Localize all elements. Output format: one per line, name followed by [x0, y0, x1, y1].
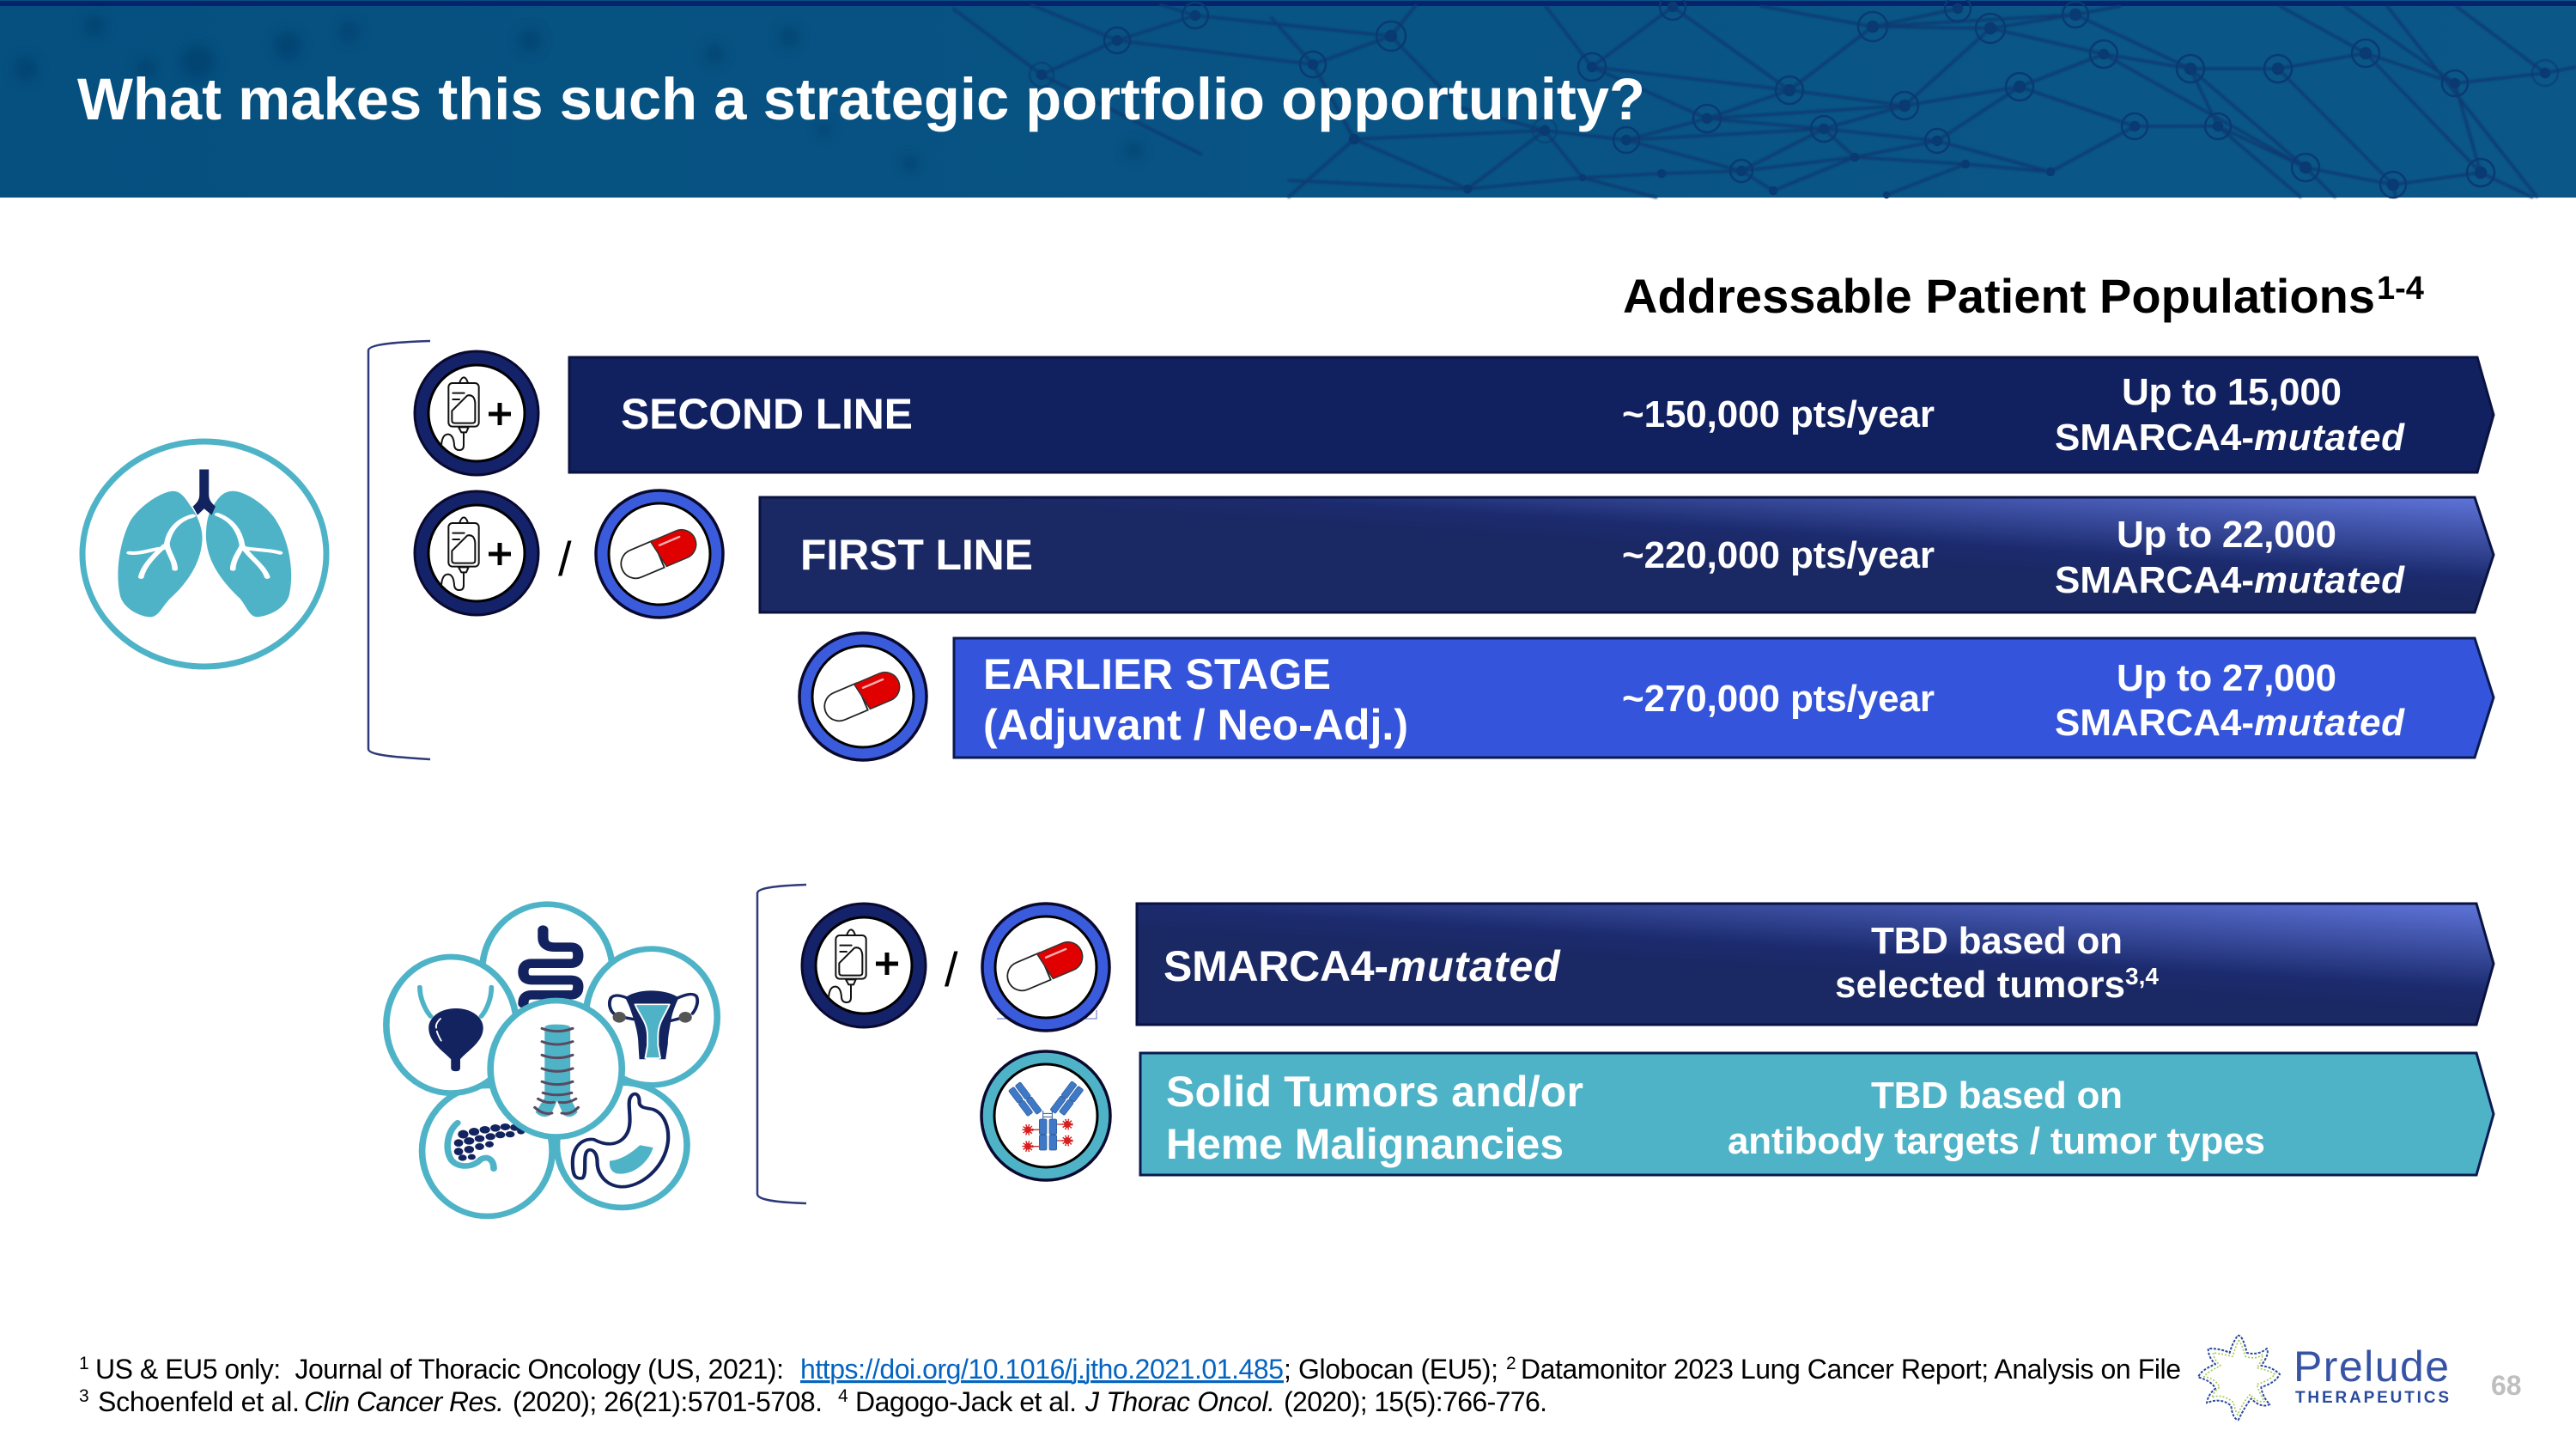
arrow bar: SMARCA4-mutated: TBD based on: [1871, 920, 2123, 962]
arrow bar: solid tumors and heme malignancies: Heme Malignancies: [1166, 1120, 1564, 1168]
icon cluster: solid tumor organs: [386, 904, 717, 1216]
footnote line 2: 3: [79, 1386, 89, 1406]
separator slash: SMARCA4 row: /: [945, 942, 958, 996]
footnote line 1: 2: [1506, 1354, 1516, 1373]
arrow bar: solid tumors and heme malignancies: Solid Tumors and/or: [1166, 1068, 1583, 1116]
separator slash: first line: /: [558, 532, 572, 586]
arrow bar: first line: SMARCA4-mutated: [2055, 559, 2405, 601]
arrow bar: earlier stage: ~270,000 pts/year: [1622, 678, 1935, 720]
title: What makes this such a strategic portfolio opportunity?: [77, 66, 1645, 132]
arrow bar: earlier stage: SMARCA4-mutated: [2055, 702, 2405, 744]
organ: uterus: [586, 949, 717, 1085]
arrow bar: second line: SMARCA4-mutated: [2055, 417, 2405, 459]
icon: oral pill, first line: [596, 490, 723, 618]
column heading: addressable patient populations: 1-4: [2377, 271, 2424, 307]
organ: stomach: [556, 1083, 687, 1208]
arrow bar: SMARCA4-mutated: [1137, 904, 2494, 1025]
footnote line 1: Datamonitor 2023 Lung Cancer Report; Analysis on File: [1521, 1354, 2181, 1385]
arrow bar: second line: Up to 15,000: [2122, 371, 2342, 413]
footnote line 2: (2020); 26(21):5701-5708.: [513, 1386, 823, 1417]
footnote line 2: (2020); 15(5):766-776.: [1284, 1386, 1547, 1417]
arrow bar: earlier stage: (Adjuvant / Neo-Adj.): [983, 701, 1408, 749]
organ: bladder: [386, 957, 516, 1093]
logo: Prelude Therapeutics: Prelude: [2293, 1342, 2449, 1391]
bracket: lung group: [368, 341, 430, 759]
icon: lungs: [82, 441, 326, 667]
page number: 68: [2491, 1370, 2522, 1401]
footnote line 2: Schoenfeld et al.: [98, 1386, 300, 1417]
organ: pancreas: [422, 1086, 552, 1216]
footnote line 2: Clin Cancer Res.: [304, 1386, 504, 1417]
arrow bar: earlier stage: EARLIER STAGE: [983, 650, 1331, 698]
arrow bar: SMARCA4-mutated: 3,4: [2125, 963, 2159, 989]
icon: IV chemotherapy, second line: [415, 351, 538, 475]
header banner: [0, 0, 2576, 198]
arrow bar: earlier stage: Up to 27,000: [2117, 657, 2336, 699]
arrow bar: SMARCA4-mutated: selected tumors: [1835, 964, 2125, 1006]
footnote line 1: 1: [79, 1354, 89, 1373]
footnote line 1: https://doi.org/10.1016/j.jtho.2021.01.485: [800, 1354, 1284, 1385]
arrow bar: solid tumors and heme malignancies: antibody targets / tumor types: [1728, 1120, 2265, 1162]
icon: IV chemotherapy, first line: [415, 491, 538, 615]
logo: Prelude Therapeutics: [2198, 1336, 2449, 1420]
arrow bar: solid tumors and heme malignancies: TBD based on: [1871, 1075, 2123, 1117]
footnote line 1: ; Globocan (EU5);: [1284, 1354, 1498, 1385]
footnote line 2: J Thorac Oncol.: [1084, 1386, 1275, 1417]
arrow bar: SMARCA4-mutated: SMARCA4-mutated: [1163, 942, 1561, 990]
logo: Prelude Therapeutics: THERAPEUTICS: [2295, 1389, 2449, 1407]
icon: oral pill, earlier stage: [799, 633, 927, 760]
arrow bar: first line: ~220,000 pts/year: [1622, 534, 1935, 576]
arrow bar: first line: Up to 22,000: [2117, 514, 2336, 556]
icon: oral pill, SMARCA4 row: [982, 904, 1109, 1031]
footnote line 1: US & EU5 only: Journal of Thoracic Oncology (US, 2021):: [95, 1354, 784, 1385]
icon: antibody drug conjugate: [981, 1051, 1110, 1180]
arrow bar: second line: ~150,000 pts/year: [1622, 393, 1935, 435]
arrow bar: second line: [569, 357, 2494, 472]
footnote line 2: 4: [838, 1386, 848, 1406]
arrow bar: first line: [760, 497, 2494, 612]
footnote line 2: Dagogo-Jack et al.: [855, 1386, 1077, 1417]
icon: IV chemotherapy, SMARCA4 row: [802, 904, 926, 1027]
column heading: addressable patient populations: Addressable Patient Populations: [1623, 269, 2375, 323]
organ: small intestine: [483, 904, 612, 1037]
organ: trachea: [490, 1001, 622, 1137]
arrow bar: first line: FIRST LINE: [800, 531, 1033, 579]
bracket: solid tumor group: [757, 885, 806, 1203]
arrow bar: earlier stage: [954, 638, 2494, 758]
arrow bar: second line: SECOND LINE: [621, 390, 913, 438]
arrow bar: solid tumors and heme malignancies: [1140, 1053, 2494, 1175]
